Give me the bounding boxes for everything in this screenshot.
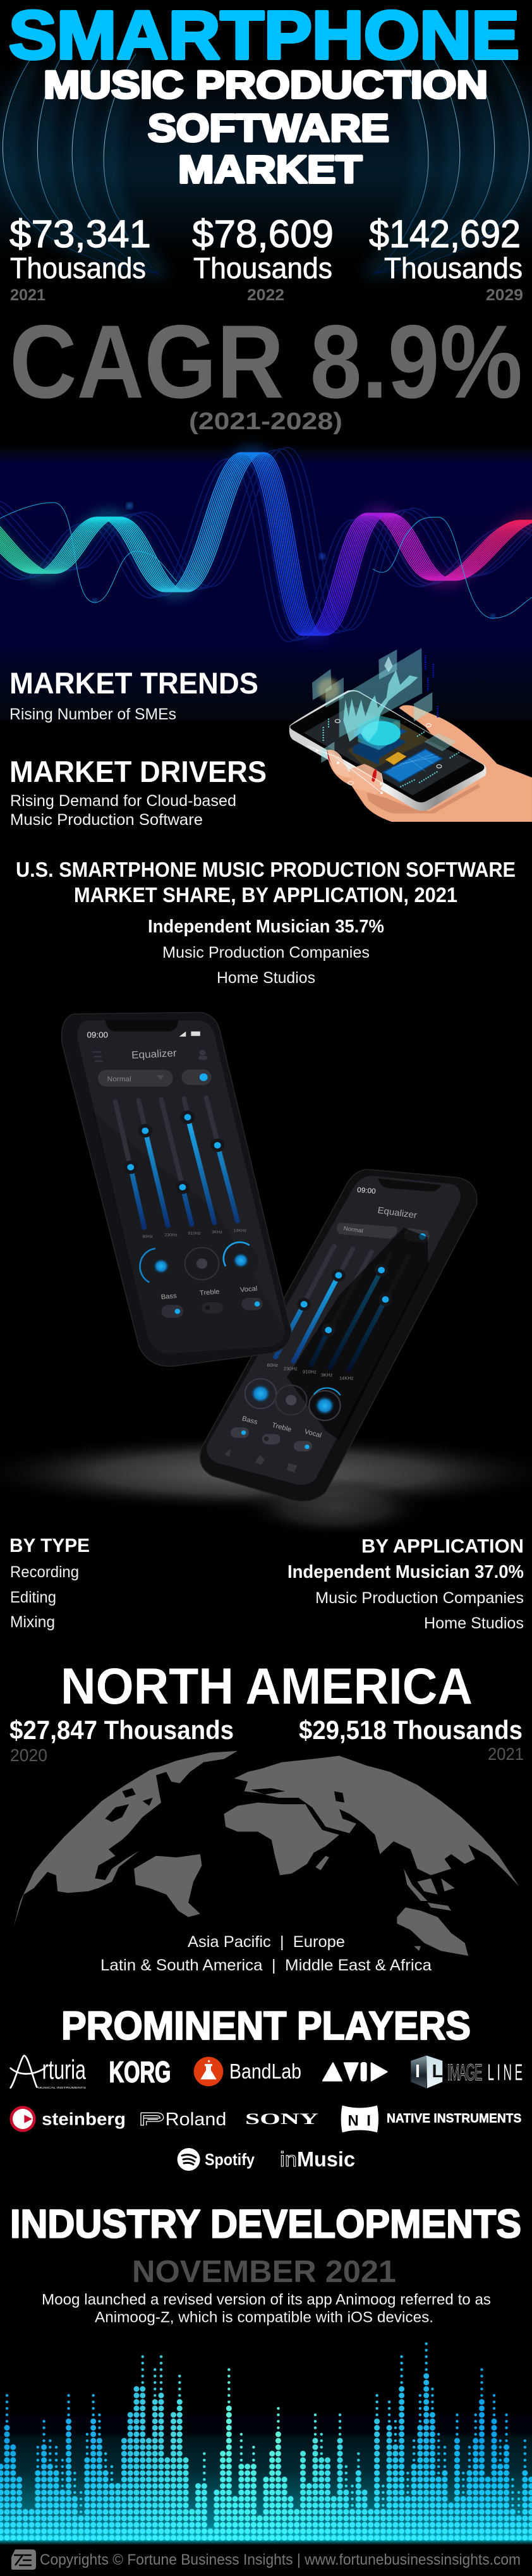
value 2022: 2022 [247,286,284,304]
logo: Native Instruments [341,2106,521,2132]
footer copyright: Copyrights © Fortune Business Insights | www.fortunebusinessinsights.com [40,2551,521,2568]
title [9,0,519,191]
phone front: Treble [199,1288,220,1297]
phone front: 3KHz [212,1230,223,1235]
phone back: 09:00 [357,1187,376,1195]
value 2021: 2021 [10,286,45,304]
logo: Image-Line: LINE [488,2060,523,2085]
logo: Roland [141,2109,226,2130]
logo: Avid [323,2063,387,2081]
by application list [287,1535,524,1632]
phone front: 910Hz [188,1231,201,1236]
phone back: 60Hz [267,1362,279,1368]
north america 2021: 2021 [488,1744,524,1764]
phone front: 230Hz [164,1233,178,1238]
illustration: two equalizer phones [62,1013,477,1501]
U.S. share list [148,917,384,987]
logo: Native Instruments: NI [348,2113,371,2130]
market drivers: Music Production Software [10,811,203,829]
phone front: 60Hz [143,1235,153,1239]
logo: Roland: Roland [166,2109,226,2130]
U.S. share list: Home Studios [217,969,315,987]
market trends: MARKET TRENDS [9,666,258,700]
value 2021: $73,341 [9,212,151,255]
value 2021: Thousands [10,252,146,284]
value 2029: 2029 [486,286,523,304]
logo: Arturia: MUSICAL INSTRUMENTS [38,2086,86,2089]
development description: Moog launched a revised version of its app Animoog referred to as [42,2291,491,2309]
value 2029: $142,692 [369,212,521,255]
logo: Image-Line [411,2056,523,2088]
value 2022 [192,212,334,304]
CAGR: (2021-2028) [189,408,342,435]
market drivers: MARKET DRIVERS [9,755,267,788]
logos: left half [9,2054,226,2132]
by application list: Home Studios [424,1615,524,1632]
logo: SONY: SONY [245,2111,318,2128]
phone back: 14KHz [339,1376,354,1381]
phone front: 14KHz [233,1229,247,1233]
north america 2020: $27,847 Thousands [9,1715,234,1745]
logo: steinberg [9,2106,126,2132]
market trends [9,666,258,723]
north america 2021 [299,1715,524,1764]
phone front: Equalizer [131,1047,177,1061]
logo: Arturia [11,2054,86,2089]
development date: NOVEMBER 2021 [132,2255,396,2289]
phone back: 3KHz [321,1372,333,1377]
logo: inMusic: Music [297,2147,355,2171]
by type list: Editing [10,1589,56,1606]
phone back: Bass [241,1415,258,1426]
title: SOFTWARE [148,106,389,149]
logo: KORG: KORG [109,2056,171,2089]
phone back: 910Hz [303,1369,317,1374]
logo: Spotify: Spotify [205,2150,255,2169]
title: MARKET [178,148,362,191]
U.S. share list: Independent Musician 35.7% [148,917,384,937]
north america 2020: 2020 [10,1745,47,1765]
phone back [200,1169,477,1501]
chart heading: U.S. market share: MARKET SHARE, BY APPLICATION, 2021 [74,883,457,906]
by application list: Independent Musician 37.0% [287,1562,524,1582]
other regions: Asia Pacific | Europe [188,1933,345,1951]
phone front: 09:00 [87,1030,108,1039]
by type list: Mixing [10,1613,55,1631]
other regions: Latin & South America | Middle East & Africa [100,1956,432,1974]
phone back: Vocal [303,1428,322,1439]
phone front: Normal [107,1076,131,1084]
phone back: Treble [271,1422,292,1434]
value 2022: $78,609 [192,212,334,255]
development description: Animoog-Z, which is compatible with iOS devices. [95,2309,433,2326]
by type list: Recording [10,1563,79,1581]
other regions [100,1933,432,1974]
illustration: hand holding smartphone [289,648,532,822]
logo: Image-Line: L [432,2061,443,2082]
logo: BandLab icon [194,2057,223,2086]
logo: inMusic: in [280,2147,297,2171]
chart heading: U.S. market share [16,858,516,906]
logo: Spotify [178,2148,255,2171]
market drivers: Rising Demand for Cloud-based [10,792,236,810]
prominent players heading: PROMINENT PLAYERS [61,2004,471,2048]
phone back: Normal [343,1224,364,1234]
value 2021 [9,212,151,304]
value 2029 [369,212,523,304]
header background arcs [0,54,532,274]
market drivers [9,755,267,829]
phone back: Equalizer [377,1206,418,1221]
logo: Image-Line: I [415,2061,420,2082]
logo: BandLab: BandLab [229,2060,301,2083]
phone front [62,1013,291,1366]
market size values [9,212,523,304]
market trends: Rising Number of SMEs [9,705,176,723]
value 2022: Thousands [193,252,332,284]
north america 2020 [9,1715,234,1765]
logo: steinberg: steinberg [42,2109,126,2129]
phone front: Vocal [239,1285,258,1294]
equalizer dot bars [0,2333,532,2545]
floor light [0,1434,532,1537]
development description [42,2291,491,2326]
logo: Arturia: rturia [42,2054,86,2085]
logo: Image-Line: IMAGE [447,2060,482,2085]
U.S. share list: Music Production Companies [162,944,370,961]
by type list: BY TYPE [9,1534,90,1556]
phone back: 230Hz [284,1366,298,1371]
logos: right half [323,2056,523,2132]
phone front: Bass [160,1292,178,1301]
by application list: Music Production Companies [315,1589,524,1607]
by type list [9,1534,90,1631]
value 2029: Thousands [384,252,523,284]
title: MUSIC PRODUCTION [44,63,488,106]
world map [12,1751,519,1956]
logo: Native Instruments: NATIVE INSTRUMENTS [387,2111,521,2125]
sound wave banner [0,443,532,722]
icon: Fortune Business Insights [11,2549,36,2570]
north america heading: NORTH AMERICA [61,1658,473,1715]
by application list: BY APPLICATION [361,1535,524,1557]
